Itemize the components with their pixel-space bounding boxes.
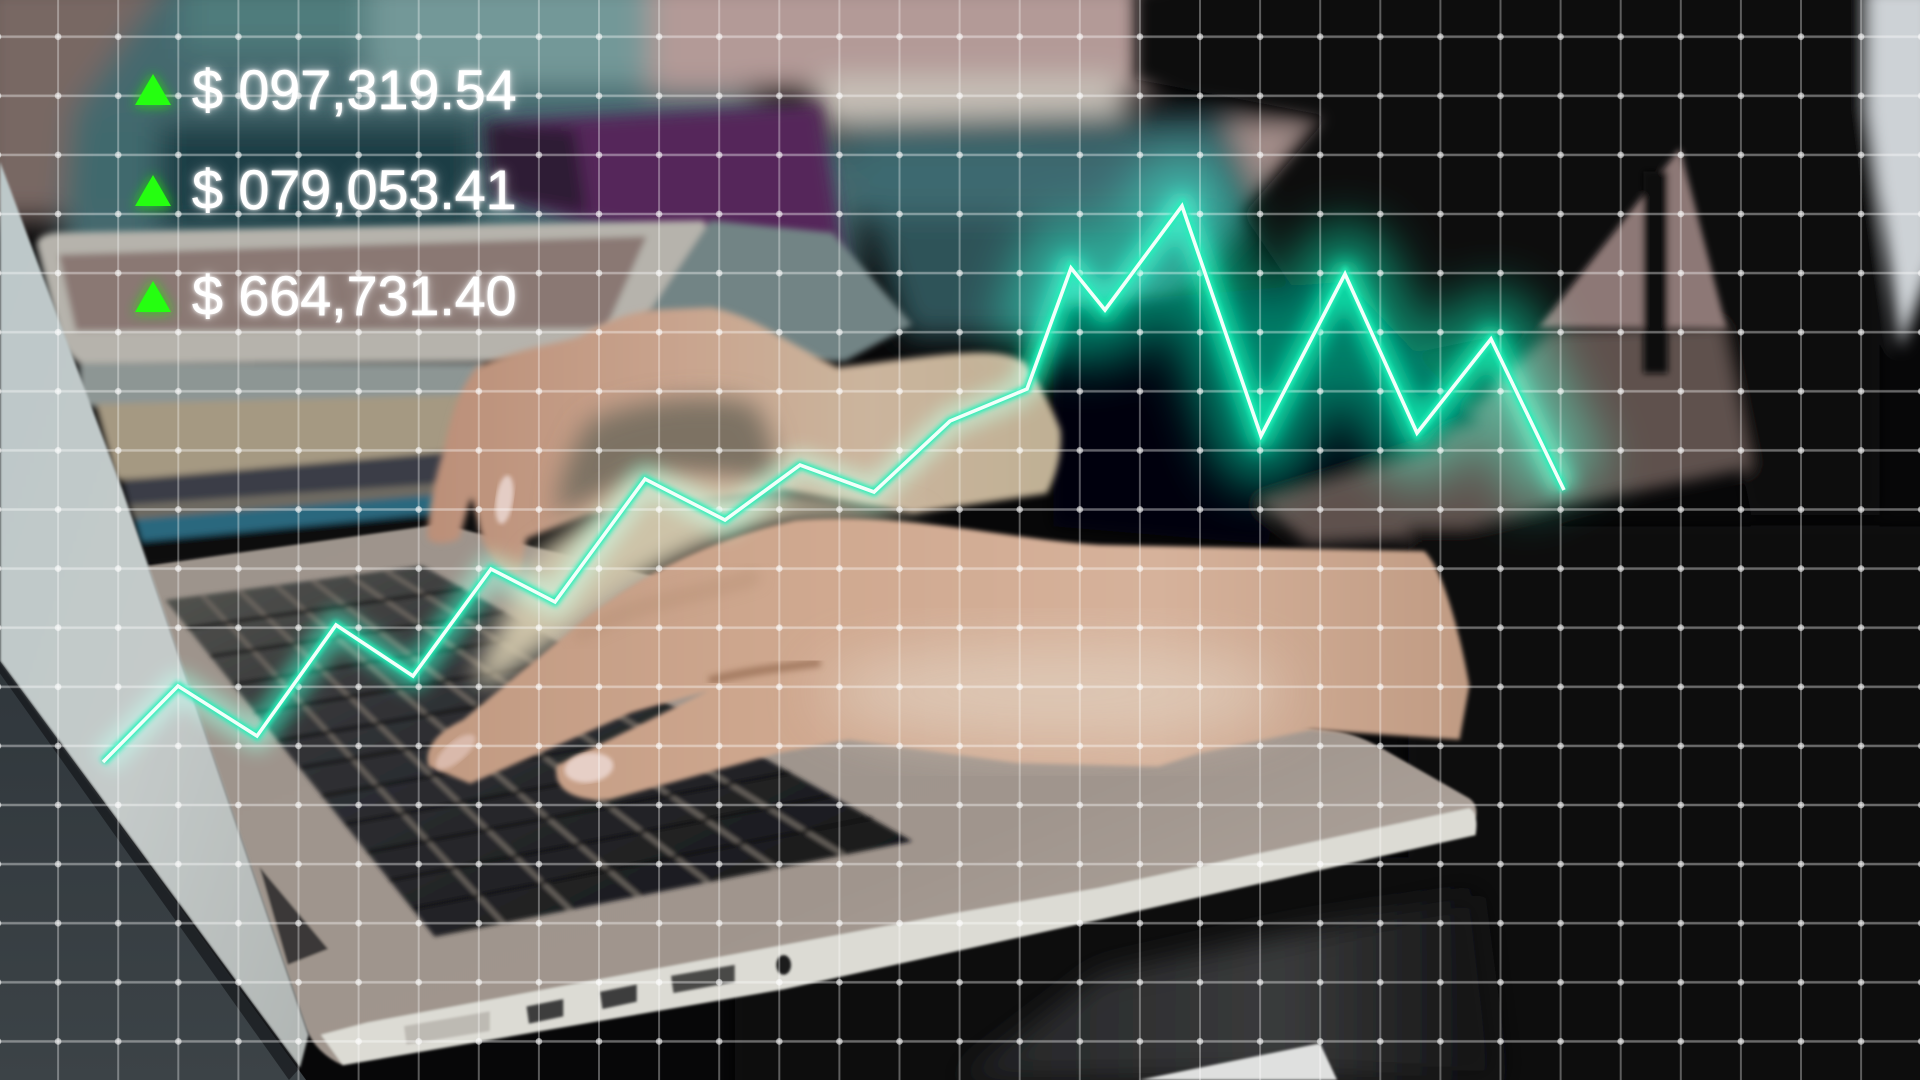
desk bbox=[0, 661, 306, 1080]
far hand bbox=[427, 307, 1061, 576]
laptop lid bbox=[0, 162, 309, 1068]
icon: up triangle 3 bbox=[134, 280, 172, 313]
blurred background objects bbox=[0, 0, 1329, 337]
purple cloth bbox=[484, 104, 845, 263]
paper corner on desk bbox=[1139, 1043, 1337, 1080]
laptop base bbox=[147, 524, 1477, 1065]
icon: up triangle 1 bbox=[134, 73, 172, 106]
value 2: $ 079,053.41 bbox=[192, 159, 517, 221]
front edge of laptop bbox=[321, 808, 1477, 1065]
pale blurred moving finger bbox=[471, 480, 931, 686]
tablet on the desk bbox=[37, 220, 912, 563]
icon: up triangle 2 bbox=[134, 174, 172, 207]
dark sleeve and right side bbox=[735, 0, 1920, 1080]
gap between the hands bbox=[557, 398, 774, 514]
value 1: $ 097,319.54 bbox=[192, 59, 517, 121]
desk reflection bbox=[955, 894, 1500, 1080]
value 3: $ 664,731.40 bbox=[192, 265, 517, 327]
pink wedge with dark pen bbox=[1539, 148, 1727, 373]
laptop ports bbox=[404, 955, 791, 1044]
near hand bbox=[427, 519, 1469, 800]
hand shading and nails bbox=[430, 474, 1286, 786]
keyboard bbox=[165, 566, 912, 937]
